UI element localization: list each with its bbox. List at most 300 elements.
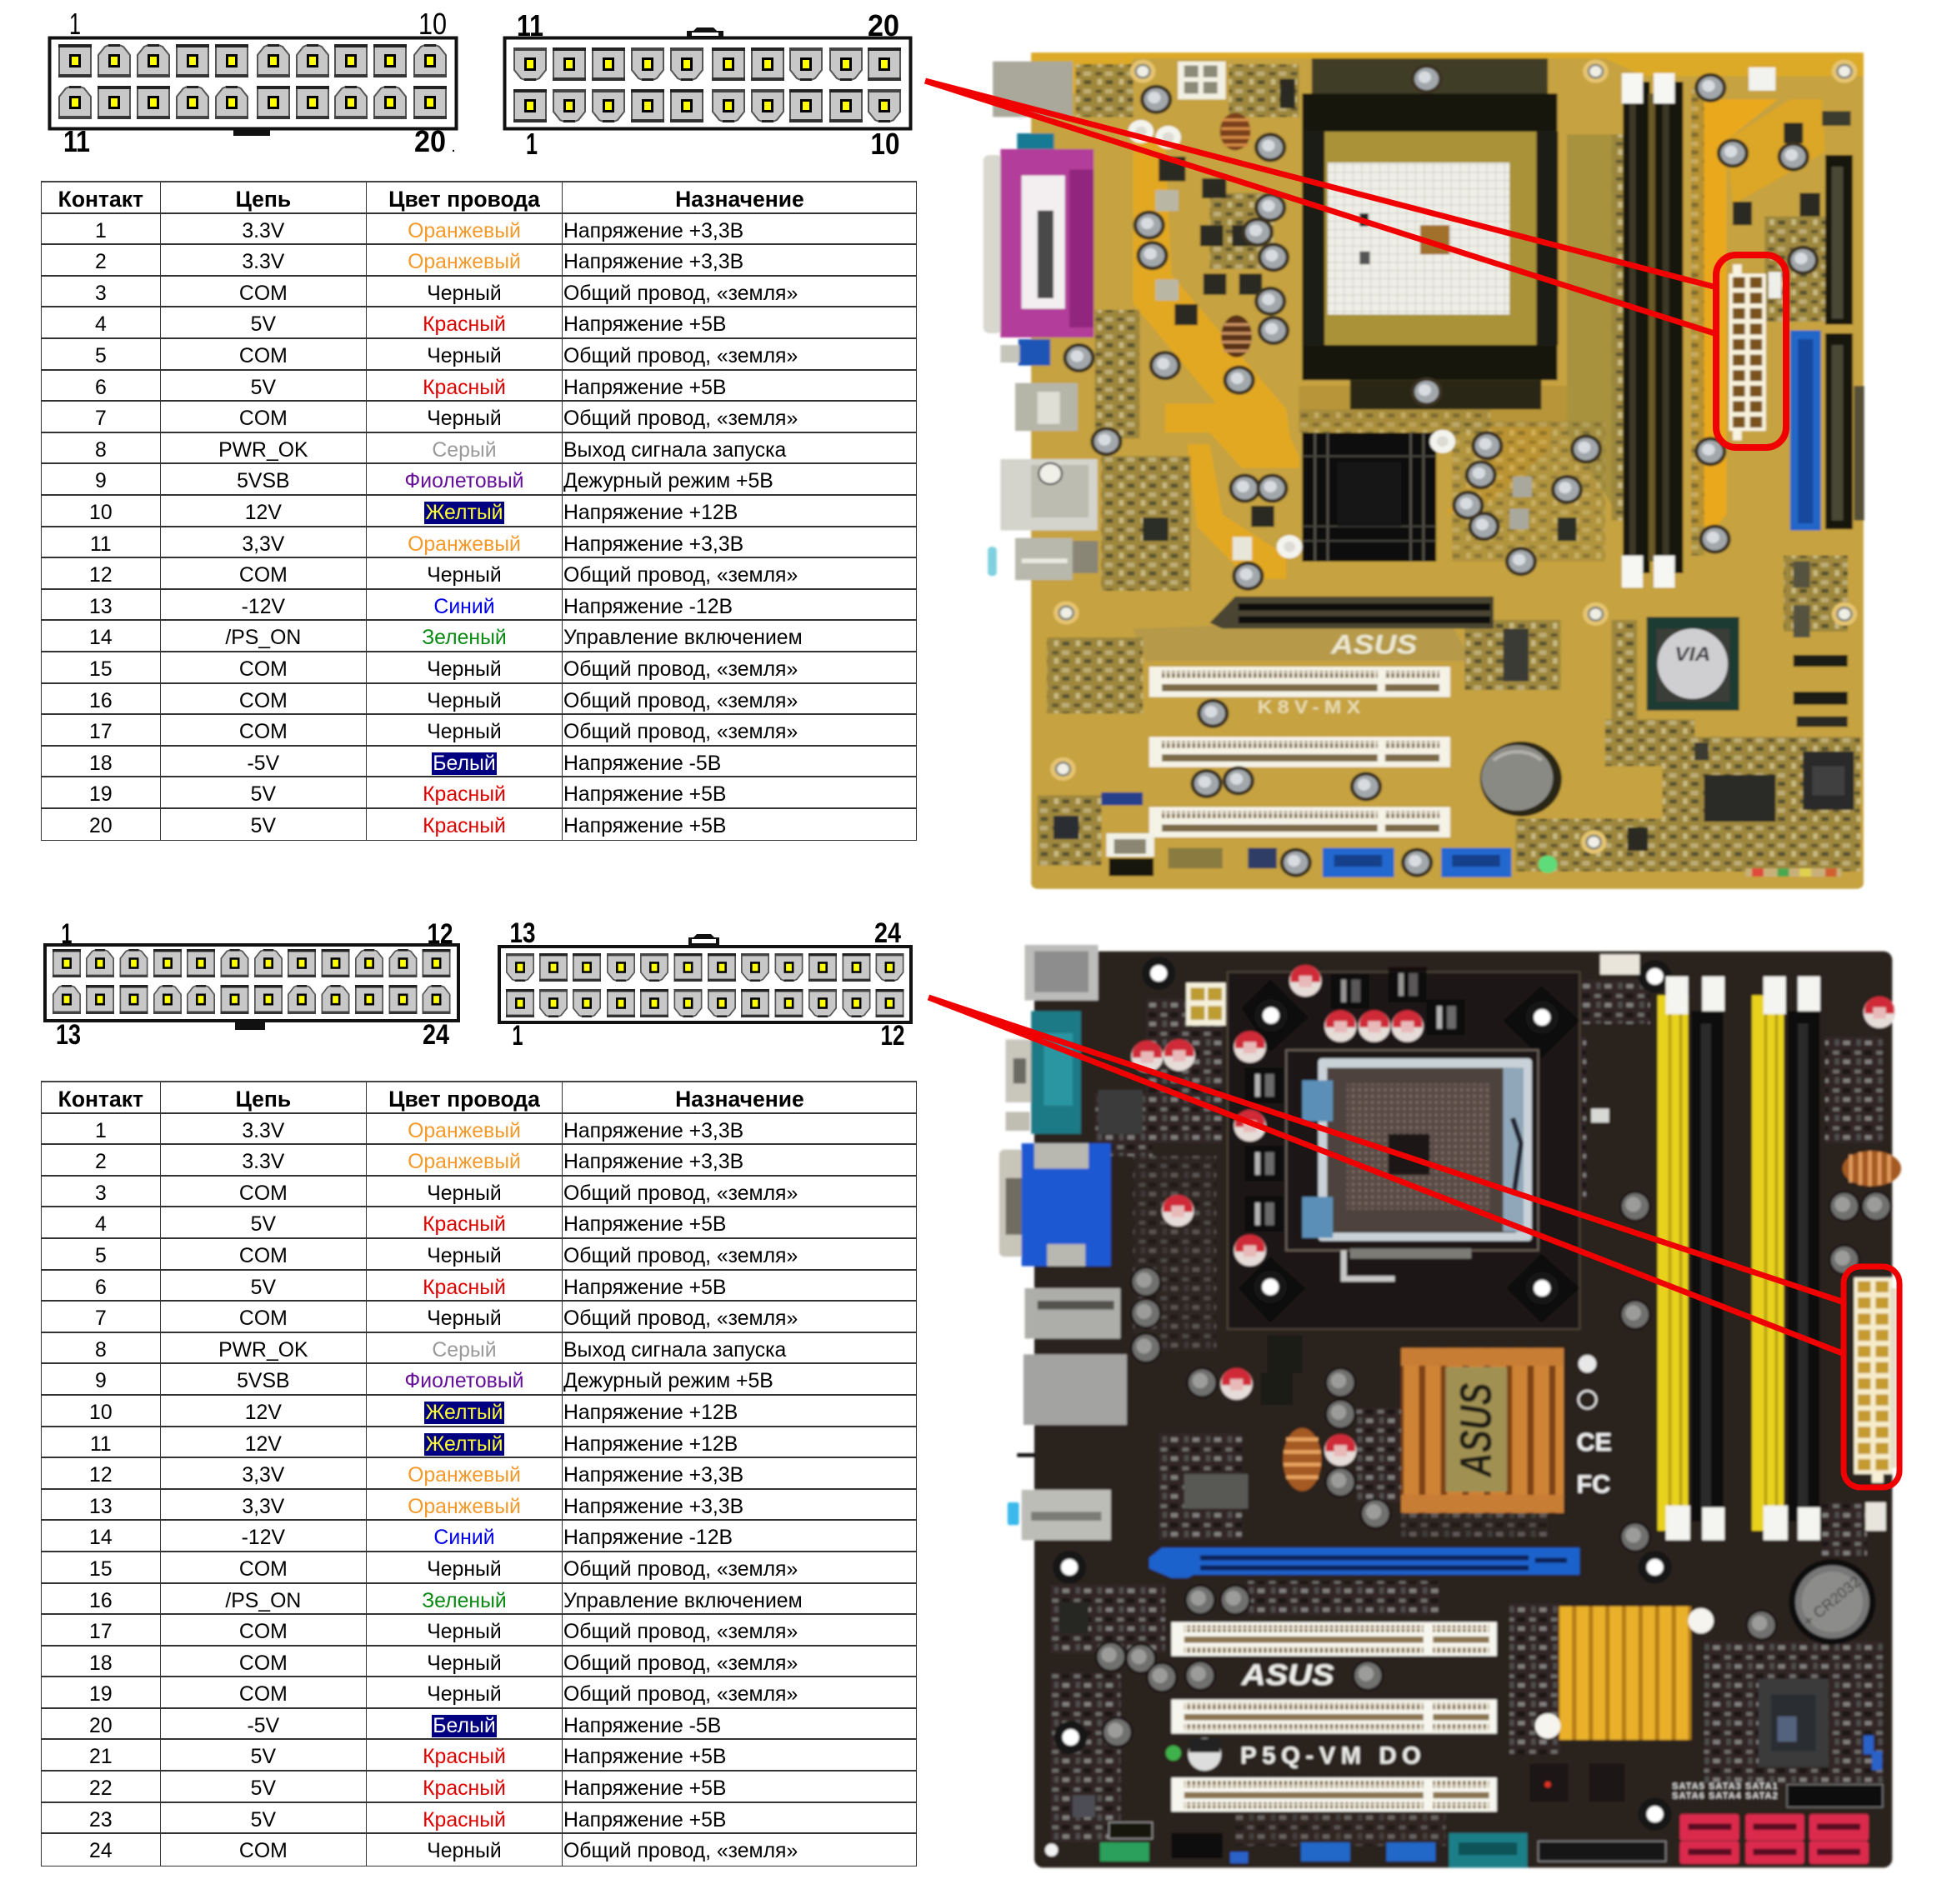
- row 13: Синий: [433, 596, 495, 618]
- row 14: Управление включением: [563, 627, 803, 649]
- AGP slot: [1209, 597, 1494, 628]
- ASUS logo and model name: [1258, 630, 1418, 717]
- chipset heatsink: [1302, 432, 1436, 562]
- gold south bridge heatsink: [1535, 1607, 1714, 1740]
- row 1: [42, 214, 916, 245]
- CPU socket and retention frame: [1302, 58, 1558, 409]
- row 11: [42, 1427, 916, 1458]
- row 1: 3.3V: [242, 220, 284, 242]
- PCB: [1034, 952, 1892, 1867]
- row 11: 12V: [245, 1433, 282, 1456]
- certification logos: [1576, 1109, 1612, 1499]
- row 20: Напряжение -5В: [563, 1715, 721, 1737]
- row 8: PWR_OK: [218, 1339, 308, 1362]
- row 15: Общий провод, «земля»: [563, 1558, 798, 1581]
- pin numbers: [510, 917, 905, 1052]
- row 7: 7: [95, 1307, 107, 1330]
- table header: Цвет провода: [388, 187, 540, 212]
- table header: Контакт: [58, 187, 143, 212]
- CMOS battery: [1789, 1559, 1875, 1645]
- chips: SATA6 SATA4 SATA2: [1672, 1791, 1778, 1801]
- pin numbers: 24: [423, 1019, 449, 1051]
- PCI Express slot: [1149, 1547, 1579, 1578]
- row 12: Черный: [427, 564, 502, 587]
- row 18: Черный: [427, 1652, 502, 1675]
- row 13: 3,3V: [242, 1496, 284, 1518]
- MOSFET chokes: [1245, 967, 1465, 1232]
- CPU socket and mounting area: [1228, 972, 1579, 1329]
- row 23: Напряжение +5В: [563, 1809, 726, 1832]
- row 20: Напряжение +5В: [563, 815, 726, 837]
- row 23: Красный: [423, 1809, 506, 1832]
- pin numbers: 1: [526, 127, 538, 161]
- row 15: COM: [239, 1558, 288, 1581]
- row 6: 6: [95, 1277, 107, 1299]
- row 17: Общий провод, «земля»: [563, 1621, 798, 1643]
- row 15: 15: [89, 658, 113, 681]
- ASUS logo and model name: ASUS: [1330, 630, 1418, 660]
- row 21: Напряжение +5В: [563, 1746, 726, 1768]
- row 2: [42, 1145, 916, 1177]
- row 1: 1: [95, 1120, 107, 1142]
- row 24: Черный: [427, 1840, 502, 1862]
- row 18: -5V: [248, 752, 279, 775]
- row 12: [42, 1458, 916, 1490]
- row 15: 15: [89, 1558, 113, 1581]
- arrow: red callout from 24-pin diagram to motherboard socket: [928, 997, 1899, 1487]
- row 17: [42, 1615, 916, 1647]
- row 19: [42, 777, 916, 809]
- row 13: [42, 590, 916, 621]
- row 12: [42, 558, 916, 590]
- row 11: Напряжение +12В: [563, 1433, 738, 1456]
- VIA south bridge chip: VIA: [1674, 643, 1710, 666]
- row 3: Общий провод, «земля»: [563, 282, 798, 305]
- SATA connectors: [1679, 1814, 1869, 1864]
- row 12: COM: [239, 564, 288, 587]
- row 4: 4: [95, 313, 107, 336]
- row 18: [42, 747, 916, 777]
- row 2: Оранжевый: [408, 1151, 521, 1173]
- row 6: Напряжение +5В: [563, 377, 726, 399]
- row 4: Красный: [423, 1213, 506, 1236]
- row 10: 12V: [245, 502, 282, 524]
- row 3: Общий провод, «земля»: [563, 1182, 798, 1205]
- pin numbers: 13: [56, 1019, 81, 1051]
- row 2: 2: [95, 251, 107, 273]
- row 3: 3: [95, 1182, 107, 1205]
- copper north bridge heatsink: ASUS: [1452, 1382, 1501, 1478]
- VIA south bridge chip: [1647, 617, 1739, 711]
- rear I/O ports: [984, 62, 1098, 580]
- row 5: 5: [95, 345, 107, 367]
- row 9: 5VSB: [237, 1370, 290, 1392]
- row 18: 18: [89, 752, 113, 775]
- connector diagram: 24-pin, latch at bottom: [45, 918, 458, 1051]
- highlight: 24-pin socket outline: [1844, 1267, 1899, 1487]
- red solid capacitors: [1131, 965, 1895, 1466]
- pins: 20-pin left bottom row: [58, 86, 447, 119]
- row 5: Черный: [427, 1245, 502, 1267]
- table header: Цепь: [235, 187, 291, 212]
- CMOS battery: [1480, 742, 1562, 817]
- row 12: Напряжение +3,3В: [563, 1464, 743, 1487]
- row 16: 16: [89, 1590, 113, 1612]
- pin numbers: 24: [874, 917, 901, 949]
- row 12: 12: [89, 564, 113, 587]
- row 20: [89, 809, 726, 840]
- row 15: [42, 1552, 916, 1583]
- pin numbers: 10: [870, 127, 900, 161]
- motherboard photo: ASUS P5Q-VM DO (dark PCB): [999, 945, 1901, 1867]
- row 12: 3,3V: [242, 1464, 284, 1487]
- row 4: 5V: [251, 313, 276, 336]
- row 15: Черный: [427, 1558, 502, 1581]
- copper north bridge heatsink: [1401, 1348, 1564, 1513]
- row 7: Черный: [427, 407, 502, 430]
- row 6: 5V: [251, 1277, 276, 1299]
- row 1: Оранжевый: [408, 1120, 521, 1142]
- row 9: Фиолетовый: [404, 1370, 524, 1392]
- row 12: Оранжевый: [408, 1464, 521, 1487]
- row 10: Желтый: [425, 1402, 503, 1424]
- row 8: 8: [95, 439, 107, 462]
- row 3: Черный: [427, 282, 502, 305]
- ASUS logo and model name: ASUS: [1241, 1659, 1334, 1692]
- row 2: Оранжевый: [408, 251, 521, 273]
- row 14: Синий: [433, 1527, 495, 1549]
- row 7: COM: [239, 1307, 288, 1330]
- row 10: Желтый: [425, 502, 503, 524]
- row 21: 21: [89, 1746, 113, 1768]
- row 7: [42, 1302, 916, 1333]
- row 14: Зеленый: [422, 627, 507, 649]
- row 19: [42, 1677, 916, 1709]
- row 8: PWR_OK: [218, 439, 308, 462]
- table: 20-pin connector pinout: [41, 181, 917, 841]
- row 19: Красный: [423, 783, 506, 806]
- row 1: Напряжение +3,3В: [563, 1120, 743, 1142]
- row 15: Общий провод, «земля»: [563, 658, 798, 681]
- row 6: [42, 371, 916, 402]
- pins: 24-pin right bottom row: [506, 989, 903, 1017]
- row 22: [42, 1772, 916, 1803]
- row 4: [42, 1207, 916, 1239]
- row 5: Общий провод, «земля»: [563, 345, 798, 367]
- row 24: 24: [89, 1840, 113, 1862]
- row 9: [42, 464, 916, 496]
- table header: Цвет провода: [388, 1087, 540, 1112]
- row 9: 9: [95, 470, 107, 492]
- rear I/O ports: [999, 945, 1127, 1540]
- pins: 20-pin right bottom row: [513, 89, 901, 122]
- row 8: Серый: [432, 1339, 497, 1362]
- connector diagram: 20-pin, latch at bottom: [50, 7, 457, 158]
- row 8: [42, 1333, 916, 1364]
- certification logos: FC: [1576, 1471, 1610, 1499]
- row 10: 10: [89, 502, 113, 524]
- PCI slots: [1172, 1622, 1497, 1812]
- row 1: 1: [95, 220, 107, 242]
- table header: Цепь: [235, 1087, 291, 1112]
- chips: [1054, 67, 1854, 851]
- USB and front panel headers: [1101, 792, 1841, 877]
- pins: 24-pin right top row: [506, 953, 903, 982]
- ASUS logo and model name: K8V-MX: [1258, 697, 1363, 717]
- row 19: 19: [89, 1683, 113, 1706]
- row 12: 12: [89, 1464, 113, 1487]
- pins: 24-pin left top row: [53, 949, 450, 977]
- row 7: 7: [95, 407, 107, 430]
- row 18: Общий провод, «земля»: [563, 1652, 798, 1675]
- row 11: Напряжение +3,3В: [563, 533, 743, 556]
- CMOS battery: + CR2032: [1799, 1572, 1864, 1630]
- row 2: Напряжение +3,3В: [563, 1151, 743, 1173]
- row 17: COM: [239, 721, 288, 743]
- row 14: 14: [89, 1527, 113, 1549]
- row 2: 2: [95, 1151, 107, 1173]
- SMD component clusters: [1038, 64, 1860, 872]
- row 24: Общий провод, «земля»: [563, 1840, 798, 1862]
- row 2: 3.3V: [242, 251, 284, 273]
- row 1: Напряжение +3,3В: [563, 220, 743, 242]
- row 13: Оранжевый: [408, 1496, 521, 1518]
- row 14: -12V: [242, 1527, 285, 1549]
- row 20: Красный: [423, 815, 506, 837]
- row 20: 20: [89, 1715, 113, 1737]
- row 9: 9: [95, 1370, 107, 1392]
- row 7: [42, 402, 916, 433]
- row 20: Белый: [433, 1715, 496, 1737]
- row 8: Серый: [432, 439, 497, 462]
- row 4: Напряжение +5В: [563, 1213, 726, 1236]
- pin numbers: 20: [868, 8, 899, 42]
- DIMM memory slots: [1600, 954, 1820, 1540]
- pins: 20-pin right top row: [513, 47, 901, 81]
- row 11: [42, 527, 916, 558]
- row 4: 5V: [251, 1213, 276, 1236]
- row 16: Зеленый: [422, 1590, 507, 1612]
- row 10: Напряжение +12В: [563, 1402, 738, 1424]
- row 20: -5V: [248, 1715, 279, 1737]
- row 19: 19: [89, 783, 113, 806]
- row 17: Черный: [427, 1621, 502, 1643]
- row 8: Выход сигнала запуска: [563, 1339, 786, 1362]
- row 15: COM: [239, 658, 288, 681]
- row 16: [42, 1583, 916, 1615]
- row 10: Напряжение +12В: [563, 502, 738, 524]
- row 16: 16: [89, 690, 113, 712]
- row 5: COM: [239, 1245, 288, 1267]
- row 22: 22: [89, 1777, 113, 1800]
- row 14: Напряжение -12В: [563, 1527, 733, 1549]
- row 1: Оранжевый: [408, 220, 521, 242]
- row 13: 13: [89, 596, 113, 618]
- row 13: 13: [89, 1496, 113, 1518]
- row 6: Красный: [423, 377, 506, 399]
- row 4: Напряжение +5В: [563, 313, 726, 336]
- pins: 20-pin left top row: [58, 44, 447, 77]
- arrow: red callout from 20-pin diagram to motherboard socket: [925, 81, 1786, 447]
- row 3: COM: [239, 1182, 288, 1205]
- pin numbers: 20: [414, 124, 446, 158]
- row 14: [42, 1521, 916, 1552]
- IDE and floppy connectors: [1790, 155, 1864, 531]
- connector diagram: 20-pin, latch at top: [505, 8, 910, 161]
- row 21: 5V: [251, 1746, 276, 1768]
- row 24: COM: [239, 1840, 288, 1862]
- row 5: COM: [239, 345, 288, 367]
- SATA connectors: [1794, 655, 1848, 727]
- pin numbers: 12: [880, 1020, 905, 1052]
- row 12: Общий провод, «земля»: [563, 564, 798, 587]
- DIMM memory slots: [1622, 73, 1683, 587]
- row 8: Выход сигнала запуска: [563, 439, 786, 462]
- row 18: 18: [89, 1652, 113, 1675]
- row 6: Красный: [423, 1277, 506, 1299]
- row 17: 17: [89, 721, 113, 743]
- row 9: Дежурный режим +5В: [563, 470, 773, 492]
- row 18: [42, 1647, 916, 1677]
- pin numbers: 13: [510, 917, 535, 949]
- row 5: [42, 339, 916, 371]
- pins: 24-pin left bottom row: [53, 985, 450, 1014]
- row 16: [42, 683, 916, 715]
- row 20: [42, 1709, 916, 1740]
- highlight: 20-pin socket outline: [1716, 255, 1786, 447]
- row 14: [42, 621, 916, 652]
- row 7: Черный: [427, 1307, 502, 1330]
- PCI slots: [1149, 667, 1450, 837]
- table: 24-pin connector pinout: [41, 1081, 917, 1867]
- row 17: Черный: [427, 721, 502, 743]
- row 17: COM: [239, 1621, 288, 1643]
- row 15: [42, 652, 916, 683]
- pin numbers: [63, 7, 456, 158]
- row 4: 4: [95, 1213, 107, 1236]
- row 4: Красный: [423, 313, 506, 336]
- row 19: 5V: [251, 783, 276, 806]
- row 18: COM: [239, 1652, 288, 1675]
- pin numbers: 1: [512, 1020, 523, 1052]
- row 6: Напряжение +5В: [563, 1277, 726, 1299]
- capacitors: [1050, 60, 1857, 877]
- 20-pin ATX power connector: [1730, 264, 1781, 440]
- pin numbers: 1: [62, 918, 72, 950]
- ASUS logo and model name: [1240, 1659, 1424, 1770]
- chips: [1060, 1090, 1886, 1817]
- row 23: 5V: [251, 1809, 276, 1832]
- row 22: Напряжение +5В: [563, 1777, 726, 1800]
- connector diagram: 24-pin, latch at top: [499, 917, 911, 1052]
- row 17: 17: [89, 1621, 113, 1643]
- row 6: [42, 1271, 916, 1302]
- row 4: [42, 307, 916, 339]
- row 3: [42, 1177, 916, 1207]
- 24-pin ATX power connector: [1855, 1279, 1897, 1483]
- row 14: /PS_ON: [225, 627, 301, 649]
- chips: SATA5 SATA3 SATA1: [1672, 1782, 1778, 1792]
- row 3: [42, 277, 916, 307]
- voltage regulator parts: [1155, 79, 1295, 357]
- row 11: Оранжевый: [408, 533, 521, 556]
- row 20: 5V: [251, 815, 276, 837]
- row 22: Красный: [423, 1777, 506, 1800]
- row 14: 14: [89, 627, 113, 649]
- row 3: 3: [95, 282, 107, 305]
- row 13: -12V: [242, 596, 285, 618]
- pin numbers: 11: [517, 8, 543, 42]
- ATX12V 4-pin connector: [1186, 982, 1226, 1026]
- row 20: 20: [89, 815, 113, 837]
- row 24: [89, 1834, 798, 1866]
- row 21: Красный: [423, 1746, 506, 1768]
- row 22: 5V: [251, 1777, 276, 1800]
- row 5: Черный: [427, 345, 502, 367]
- row 9: 5VSB: [237, 470, 290, 492]
- row 16: Управление включением: [563, 1590, 803, 1612]
- row 9: Дежурный режим +5В: [563, 1370, 773, 1392]
- row 9: [42, 1364, 916, 1396]
- row 19: Напряжение +5В: [563, 783, 726, 806]
- row 10: 12V: [245, 1402, 282, 1424]
- row 9: Фиолетовый: [404, 470, 524, 492]
- row 15: Черный: [427, 658, 502, 681]
- motherboard photo: ASUS K8V-MX (gold PCB): [984, 52, 1864, 889]
- row 8: [42, 433, 916, 464]
- row 13: [42, 1490, 916, 1521]
- row 7: Общий провод, «земля»: [563, 1307, 798, 1330]
- row 13: Напряжение -12В: [563, 596, 733, 618]
- row 8: 8: [95, 1339, 107, 1362]
- row 18: Напряжение -5В: [563, 752, 721, 775]
- row 10: 10: [89, 1402, 113, 1424]
- row 11: 11: [90, 533, 112, 556]
- row 16: Черный: [427, 690, 502, 712]
- SMD component clusters: [1050, 980, 1883, 1846]
- row 2: [42, 245, 916, 277]
- row 16: /PS_ON: [225, 1590, 301, 1612]
- pin numbers: [56, 918, 453, 1051]
- row 17: [42, 715, 916, 747]
- pin numbers: [517, 8, 900, 161]
- bottom headers: [1045, 1822, 1666, 1867]
- row 5: [42, 1239, 916, 1271]
- copper toroid coils: [1283, 1151, 1901, 1491]
- row 19: Черный: [427, 1683, 502, 1706]
- row 19: COM: [239, 1683, 288, 1706]
- row 11: 3,3V: [242, 533, 284, 556]
- row 18: Белый: [433, 752, 496, 775]
- row 11: 11: [90, 1433, 112, 1456]
- row 10: [42, 1396, 916, 1427]
- row 2: 3.3V: [242, 1151, 284, 1173]
- row 3: Черный: [427, 1182, 502, 1205]
- row 11: Желтый: [425, 1433, 503, 1456]
- row 21: [42, 1740, 916, 1772]
- row 1: 3.3V: [242, 1120, 284, 1142]
- table header: Контакт: [58, 1087, 143, 1112]
- pin numbers: 1: [69, 7, 81, 41]
- row 16: COM: [239, 690, 288, 712]
- PCB: [1031, 52, 1864, 889]
- row 13: Напряжение +3,3В: [563, 1496, 743, 1518]
- row 17: Общий провод, «земля»: [563, 721, 798, 743]
- row 5: Общий провод, «земля»: [563, 1245, 798, 1267]
- row 6: 6: [95, 377, 107, 399]
- row 19: Общий провод, «земля»: [563, 1683, 798, 1706]
- row 5: 5: [95, 1245, 107, 1267]
